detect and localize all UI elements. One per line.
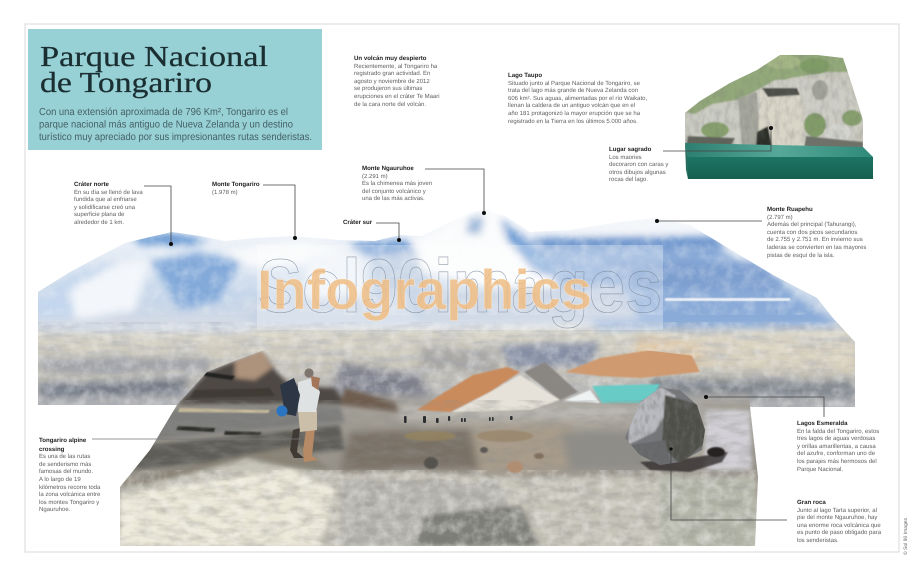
text: Un volcán muy despierto: Un volcán muy despierto	[354, 55, 426, 62]
text: Cráter norte: superficie plana de	[74, 212, 124, 218]
text: Un volcán muy despierto: Recientemente, al Tongariro ha	[354, 64, 437, 70]
text: Lagos Esmeralda: En la falda del Tongariro, estos	[797, 429, 879, 435]
hiker figure	[276, 368, 320, 462]
small rocks	[404, 430, 544, 473]
text: Un volcán muy despierto: erupciones en el cráter Te Maari	[354, 94, 440, 100]
text: Tongariro alpine crossing: A lo largo de 19	[39, 477, 81, 483]
text: Monte Ruapehu: Monte Ruapehu	[767, 206, 813, 213]
text: Tongariro alpine crossing: Ngauruhoe.	[39, 507, 70, 513]
foreground terrain	[118, 345, 760, 549]
text: Monte Tongariro: (1.978 m)	[212, 190, 238, 196]
boulder shadow	[640, 447, 728, 472]
text: Lago Taupo: Lago Taupo	[508, 72, 542, 79]
red hills and lake	[417, 350, 700, 412]
text: Lugar sagrado: Lugar sagrado	[609, 146, 651, 153]
watermark outline text: Sol90images	[258, 244, 662, 329]
text: Tongariro alpine crossing: la zona volcánica entre	[39, 492, 100, 498]
text: Cráter norte: y solidificarse creó una	[74, 205, 135, 211]
text: Gran roca: es punto de paso obligado para	[797, 530, 881, 536]
text: Lago Taupo	[508, 72, 647, 125]
text: Lagos Esmeralda: Lagos Esmeralda	[797, 420, 847, 427]
title: Parque Nacional	[40, 41, 268, 73]
text: Gran roca: Junto al lago Tarta superior, al	[797, 508, 877, 514]
text: Monte Ruapehu: cuenta con dos picos secundarios	[767, 230, 857, 236]
text: Lagos Esmeralda: tres lagos de aguas verdosas	[797, 436, 875, 442]
intro text: turístico muy apreciado por sus impresionantes rutas senderistas.	[39, 132, 312, 143]
text: Lago Taupo: 606 km². Sus aguas, alimentadas por el río Waikato,	[508, 96, 647, 102]
text: Un volcán muy despierto: agosto y noviembre de 2012	[354, 79, 430, 85]
copyright: © Sol 90 Images	[903, 517, 909, 555]
text: Tongariro alpine crossing: los montes Tongariro y	[39, 500, 99, 506]
watermark orange text: Infographics	[257, 258, 592, 321]
text: Gran roca	[797, 499, 882, 544]
text: Cráter norte: alrededor de 1 km.	[74, 220, 124, 226]
text: Lago Taupo: registrado en la Tierra en los últimos 5.000 años.	[508, 119, 638, 125]
text: Monte Ruapehu: de 2.755 y 2.751 m. En invierno sus	[767, 237, 863, 243]
text: Monte Ngauruhoe	[362, 165, 432, 202]
watermark panel	[257, 244, 663, 330]
text: Un volcán muy despierto	[354, 55, 440, 108]
text: Lagos Esmeralda: Parque Nacional.	[797, 467, 843, 473]
text: Un volcán muy despierto: de la cara norte del volcán.	[354, 102, 426, 108]
dark volcano cone	[120, 350, 398, 495]
text: Tongariro alpine crossing: de senderismo más	[39, 462, 91, 468]
lake water	[685, 143, 873, 157]
text: Tongariro alpine crossing: kilómetros recorre toda	[39, 485, 100, 491]
text: Lagos Esmeralda: y orillas amarillentas, a causa	[797, 444, 876, 450]
rocks and vegetation	[685, 55, 863, 148]
text: Tongariro alpine crossing: Tongariro alpine	[39, 437, 86, 444]
text: Monte Ruapehu: (2.797 m)	[767, 215, 793, 221]
text: Monte Tongariro: Monte Tongariro	[212, 181, 260, 188]
text: Lugar sagrado: otros dibujos algunas	[609, 170, 666, 176]
text: Lagos Esmeralda: del azufre, conforman uno de	[797, 451, 875, 457]
text: Monte Ngauruhoe: (2.291 m)	[362, 174, 388, 180]
text: Monte Ngauruhoe: una de las más activas.	[362, 196, 425, 202]
text: Gran roca: pie del monte Ngauruhoe, hay	[797, 515, 877, 521]
text: Lago Taupo: Situado junto al Parque Nacional de Tongariro, se	[508, 81, 640, 87]
leader lines and markers	[92, 126, 824, 520]
boulder	[625, 388, 705, 465]
text: Tongariro alpine crossing	[39, 437, 100, 513]
intro text: parque nacional más antiguo de Nueva Zelanda y un destino	[39, 120, 293, 130]
text: Monte Ruapehu: laderas se convierten en las mayores	[767, 245, 866, 251]
text: Cráter sur: Cráter sur	[343, 219, 372, 226]
text: Un volcán muy despierto: registrado gran actividad. En	[354, 71, 430, 77]
hikers group	[404, 416, 513, 423]
title: de Tongariro	[40, 67, 212, 99]
text: Lago Taupo: llenan la caldera de un antiguo volcán que en el	[508, 103, 635, 109]
text: Monte Ruapehu: pistas de esquí de la isla.	[767, 253, 834, 259]
text: Tongariro alpine crossing: Es una de las rutas	[39, 454, 90, 460]
text: Lago Taupo: trata del lago más grande de Nueva Zelanda con	[508, 88, 638, 94]
mountain panorama	[30, 205, 860, 410]
title panel	[28, 29, 322, 150]
text: Gran roca: una enorme roca volcánica que	[797, 523, 881, 529]
text: Cráter norte: fundida que al enfriarse	[74, 197, 137, 203]
text: Tongariro alpine crossing: famosas del mundo.	[39, 469, 93, 475]
text: Lugar sagrado	[609, 146, 668, 183]
rock strata	[176, 372, 275, 435]
text: Cráter norte: Cráter norte	[74, 181, 109, 188]
pale foreground rock	[120, 410, 755, 546]
text: Monte Ngauruhoe: Es la chimenea más joven	[362, 181, 432, 187]
text: Monte Ngauruhoe: Monte Ngauruhoe	[362, 165, 414, 172]
text: Gran roca: Gran roca	[797, 499, 826, 506]
intro text: Con una extensión aproximada de 796 Km², Tongariro es el	[39, 107, 288, 118]
text: Cráter norte	[74, 181, 143, 226]
text: Lugar sagrado: rocas del lago.	[609, 177, 648, 183]
snow and rock blobs	[38, 209, 840, 332]
text: Lugar sagrado: decoraron con caras y	[609, 162, 668, 168]
text: Un volcán muy despierto: se produjeron sus últimas	[354, 86, 422, 92]
lake illustration	[680, 50, 873, 179]
text: Monte Ngauruhoe: del conjunto volcánico y	[362, 189, 426, 195]
text: Lugar sagrado: Los maories	[609, 155, 642, 161]
lower band tones	[40, 335, 855, 402]
text: Monte Ruapehu: Además del principal (Tahurangi),	[767, 222, 856, 228]
text: Tongariro alpine crossing: crossing	[39, 446, 64, 453]
text: Monte Ruapehu	[767, 206, 866, 259]
ridge streak	[665, 298, 790, 301]
text: Lago Taupo: año 181 protagonizó la mayor erupción que se ha	[508, 111, 640, 117]
intro text	[39, 107, 312, 143]
text: Monte Tongariro	[212, 181, 260, 196]
text: Cráter norte: En su día se llenó de lava	[74, 190, 143, 196]
text: Gran roca: los senderistas.	[797, 538, 839, 544]
text: Lagos Esmeralda: los parajes más hermosos del	[797, 459, 877, 465]
title	[40, 41, 268, 99]
text: Lagos Esmeralda	[797, 420, 879, 473]
